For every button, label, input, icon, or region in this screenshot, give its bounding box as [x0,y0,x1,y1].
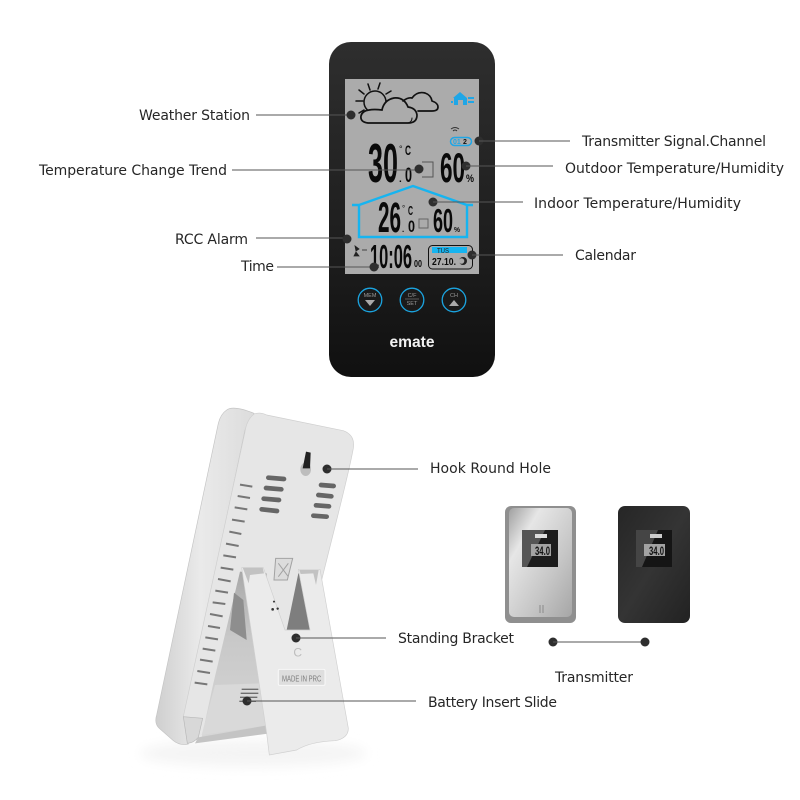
callout: Indoor Temperature/Humidity: Indoor Temperature/Humidity [534,196,741,212]
model plate [278,669,325,685]
bracket window [287,573,310,630]
indoor humidity reading: % [454,227,461,234]
indoor temperature reading: C [408,203,413,218]
callout: Standing Bracket: Standing Bracket [398,631,514,647]
callout: Transmitter: Transmitter [554,670,633,686]
callout: Battery Insert Slide: Battery Insert Slide [428,695,557,711]
button: CH [442,288,466,312]
silver transmitter body [505,506,576,623]
ground shadow [140,740,367,767]
dark recess patch [230,593,247,640]
button: C/F SET: SET [407,301,418,307]
callout: Standing Bracket [292,631,514,647]
RCC alarm icons [354,246,367,256]
rear view of weather station [140,408,367,767]
callout: Outdoor Temperature/Humidity: Outdoor Temperature/Humidity [565,161,784,177]
button: MEM [358,288,382,312]
silver transmitter [505,506,576,623]
calendar box: 27.10. [432,257,456,268]
battery slide grip [239,689,258,701]
silver transmitter face [509,508,572,617]
base lip [195,725,270,743]
callout: Battery Insert Slide [242,695,557,711]
foot opening [183,717,203,743]
icon: signal and channel badge: 2 [463,139,467,146]
callout: Temperature Change Trend [38,163,424,179]
callout: Weather Station [139,108,356,124]
rear vents [262,478,334,517]
side shell [156,408,254,745]
bracket [242,568,348,755]
calendar box: TUS [437,248,449,255]
indoor humidity reading: 60 [433,202,453,239]
icon: sun and clouds [356,83,438,123]
indoor temperature reading: ° [402,204,405,213]
outdoor temperature reading: 30 [368,132,398,194]
callout: RCC Alarm: RCC Alarm [175,232,248,248]
bracket inner hinge right [299,570,319,585]
blue house outline [352,186,473,237]
callout: Hook Round Hole: Hook Round Hole [430,461,551,477]
indoor temperature reading: 26 [378,194,401,242]
button: C/F SET [400,288,424,312]
callout: Calendar [468,248,636,264]
outdoor trend arrow box [422,162,433,177]
outdoor temperature reading: ° [399,144,403,154]
silver grip mark [540,605,543,613]
weather station front device [329,42,495,377]
button: C/F SET: C/F [408,293,417,299]
indoor temperature reading: . [402,225,404,234]
model plate: MADE IN PRC [282,675,321,684]
indoor temperature reading: 0 [408,217,415,236]
time reading: 00 [414,259,422,270]
black transmitter display: 34.0 [649,544,664,558]
callout: Transmitter Signal.Channel: Transmitter Signal.Channel [581,134,766,150]
icon: signal and channel badge: 01 [453,139,461,146]
callout: RCC Alarm [175,232,352,248]
callout: Time [240,259,378,275]
callout: Time: Time [240,259,274,275]
callout: Outdoor Temperature/Humidity [462,161,784,177]
brand logo: emate [390,334,435,351]
hook keyhole [300,452,311,476]
calendar box [428,246,472,269]
outdoor humidity reading: % [466,173,474,185]
CE mark: C [293,646,302,660]
callout: Temperature Change Trend: Temperature Change Trend [38,163,227,179]
bracket inner hinge left [243,568,264,583]
black transmitter [618,506,690,623]
callout: Indoor Temperature/Humidity [428,196,741,212]
button: MEM: MEM [364,293,377,299]
time reading [370,238,422,275]
side vents [195,485,252,684]
outdoor temperature reading: 0 [405,164,412,187]
outdoor temperature reading: . [399,174,402,185]
small holes [271,601,279,611]
black transmitter body [618,506,690,623]
device body [329,42,495,377]
recess behind bracket [202,572,270,737]
silver transmitter display: 34.0 [535,544,550,558]
icon: blue home sensor [451,92,474,105]
callout: Calendar: Calendar [575,248,636,264]
callout: Transmitter [548,638,650,686]
icon: signal and channel badge [450,128,472,146]
LCD screen [345,79,479,274]
time reading: 10:06 [370,238,412,275]
rear face [183,413,354,740]
recycle mark [274,558,293,580]
outdoor temperature reading: C [405,142,411,158]
callout: Transmitter Signal.Channel [474,134,766,150]
callout: Weather Station: Weather Station [139,108,250,124]
battery cover [202,683,270,735]
outdoor humidity reading: 60 [440,144,465,191]
button: CH: CH [450,293,458,299]
callout: Hook Round Hole [322,461,551,477]
